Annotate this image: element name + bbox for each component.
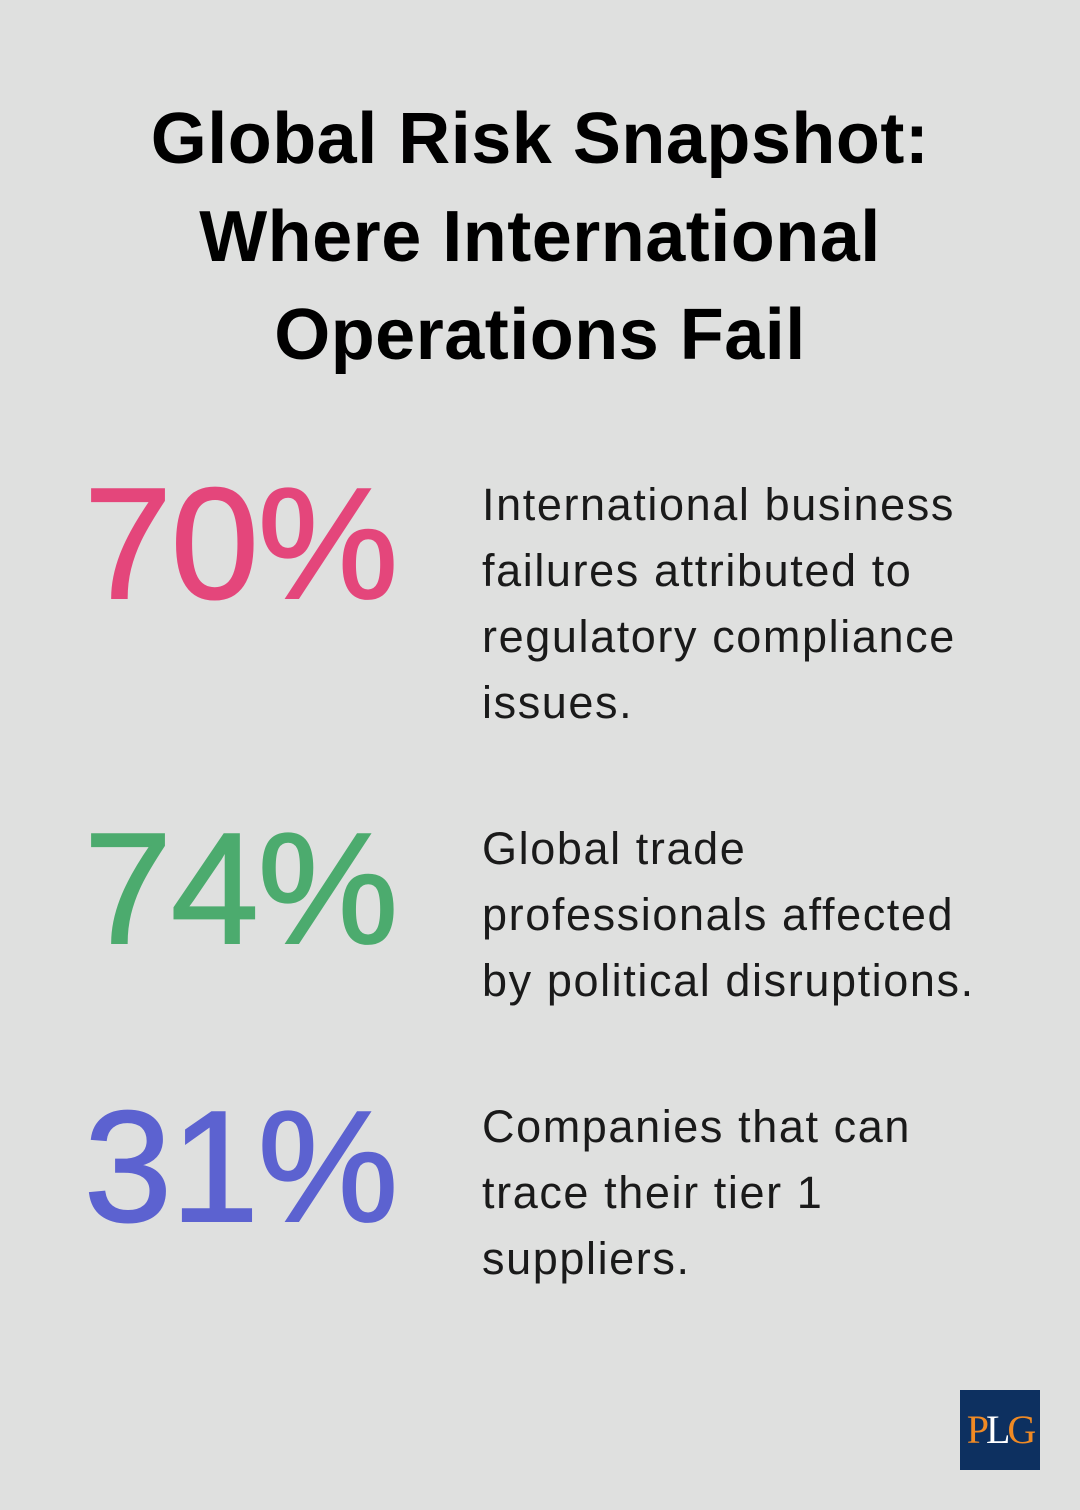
stat 1 text [482,479,956,728]
stat 1 text: International business [482,479,955,530]
title: Operations Fail [274,295,806,375]
stat 3 number: 31% [84,1079,397,1255]
logo [960,1390,1040,1470]
stat 2 text: professionals affected [482,889,954,940]
stat 1 text: failures attributed to [482,545,912,596]
stat 3 text [482,1101,911,1284]
stat 2 text: by political disruptions. [482,955,975,1006]
stat 1 text: regulatory compliance [482,611,956,662]
stat 1 number: 70% [84,456,397,632]
title: Global Risk Snapshot: [151,99,929,179]
stat 3 text: trace their tier 1 [482,1167,823,1218]
logo: PLG [967,1407,1033,1452]
stat 1 text: issues. [482,677,633,728]
stat 3 text: Companies that can [482,1101,911,1152]
title: Where International [199,197,881,277]
title [151,99,929,375]
stat 2 text [482,823,975,1006]
stat 2 number: 74% [84,801,397,977]
stat 3 text: suppliers. [482,1233,691,1284]
stat 2 text: Global trade [482,823,746,874]
